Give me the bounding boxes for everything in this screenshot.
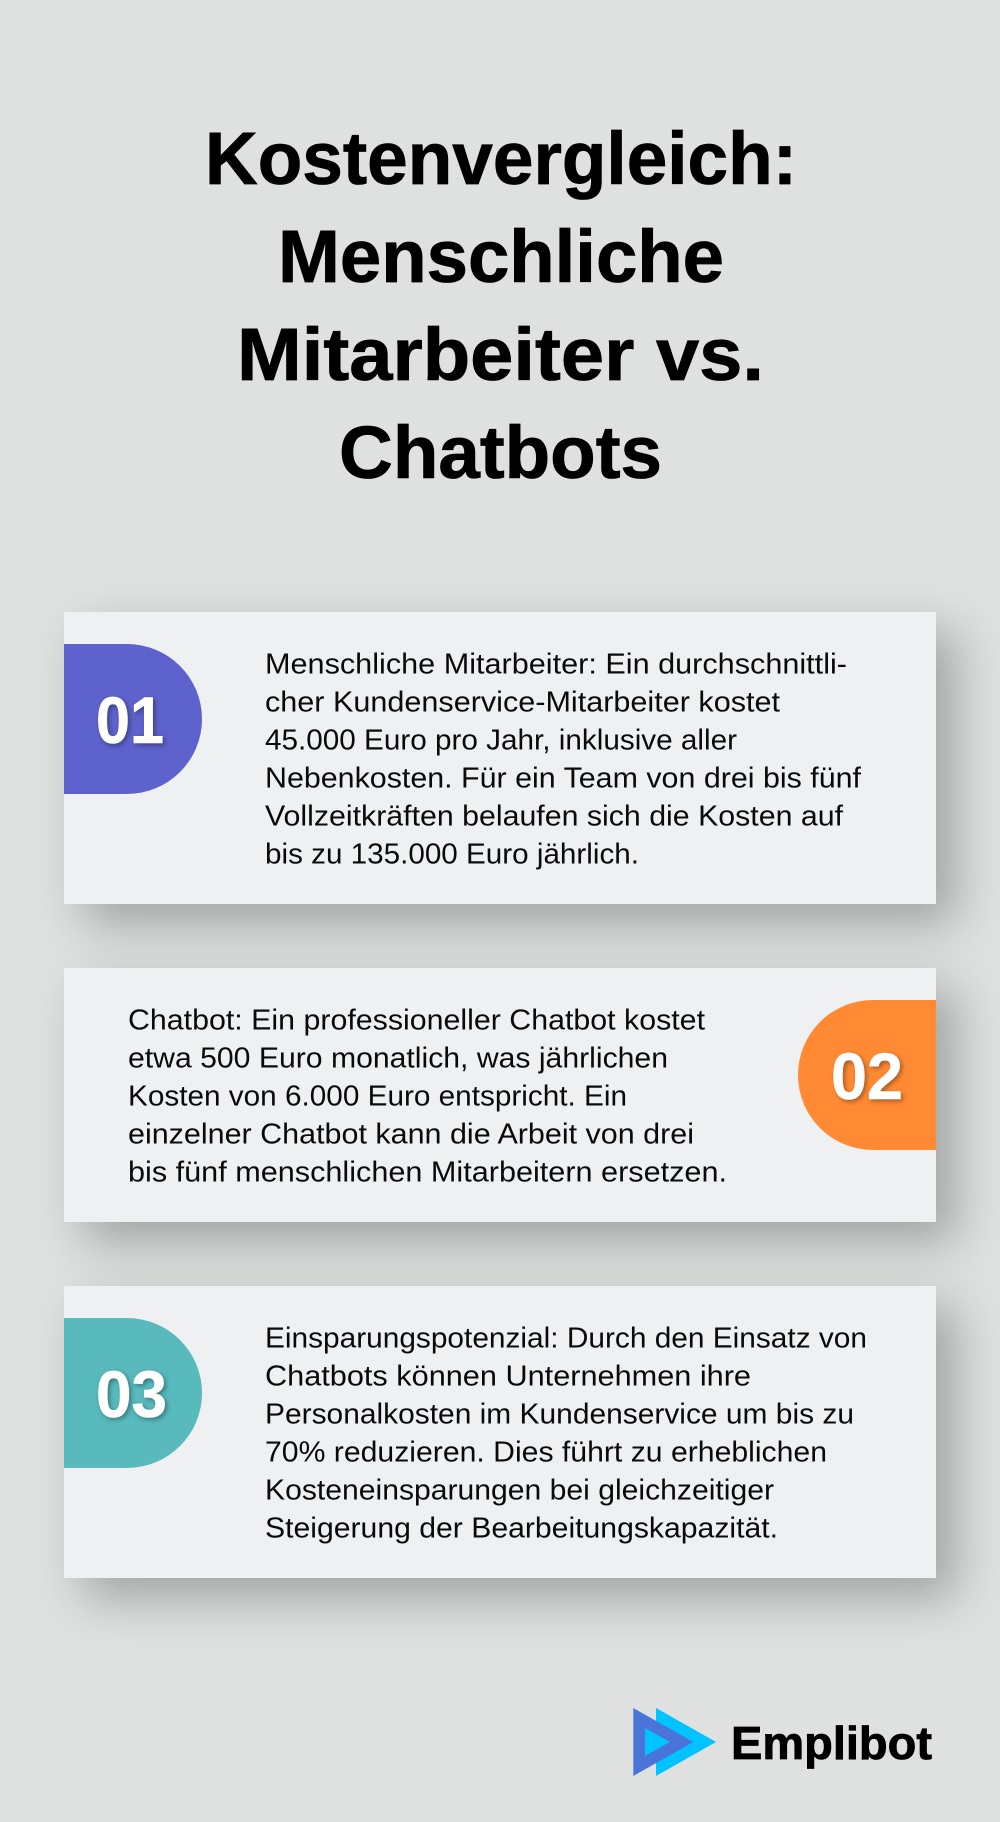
badge 01: 01 xyxy=(96,683,164,757)
title: Chatbots xyxy=(339,411,662,494)
title: Mitarbeiter vs. xyxy=(237,313,764,396)
text: chatbot costs: Kosten von 6.000 Euro entspricht. Ein xyxy=(128,1080,627,1112)
badge 03 xyxy=(64,1318,202,1468)
badge 02 xyxy=(798,1000,936,1150)
title: Menschliche xyxy=(278,215,724,298)
text: human employees costs: cher Kundenservice-Mitarbeiter kostet xyxy=(265,687,780,719)
text: savings potential: Kosteneinsparungen bei gleichzeitiger xyxy=(265,1474,774,1506)
text: human employees costs: 45.000 Euro pro Jahr, inklusive aller xyxy=(265,725,737,757)
panel: card 2 chatbot xyxy=(64,968,936,1222)
text: human employees costs: bis zu 135.000 Euro jährlich. xyxy=(265,839,639,871)
title: Kostenvergleich: xyxy=(205,117,797,200)
text: human employees costs xyxy=(265,649,862,871)
text: chatbot costs: einzelner Chatbot kann die Arbeit von drei xyxy=(128,1118,694,1150)
badge 01 xyxy=(64,644,202,794)
text: savings potential xyxy=(265,1322,867,1544)
text: human employees costs: Vollzeitkräften belaufen sich die Kosten auf xyxy=(265,801,844,833)
text: savings potential: 70% reduzieren. Dies führt zu erheblichen xyxy=(265,1436,827,1468)
icon: play triangles xyxy=(633,1708,716,1776)
text: savings potential: Chatbots können Unternehmen ihre xyxy=(265,1360,751,1392)
badge 03: 03 xyxy=(96,1357,167,1431)
text: savings potential: Personalkosten im Kundenservice um bis zu xyxy=(265,1398,854,1430)
text: human employees costs: Nebenkosten. Für ein Team von drei bis fünf xyxy=(265,763,862,795)
wordmark: Emplibot xyxy=(731,1717,932,1769)
logo: Emplibot xyxy=(633,1708,932,1776)
panel: card 1 human employees xyxy=(64,612,936,904)
text: chatbot costs: Chatbot: Ein professioneller Chatbot kostet xyxy=(128,1004,705,1036)
text: savings potential: Steigerung der Bearbeitungskapazität. xyxy=(265,1512,778,1544)
panel: card 3 savings xyxy=(64,1286,936,1578)
text: human employees costs: Menschliche Mitarbeiter: Ein durchschnittli- xyxy=(265,649,847,681)
text: chatbot costs xyxy=(128,1004,727,1188)
text: chatbot costs: etwa 500 Euro monatlich, was jährlichen xyxy=(128,1042,668,1074)
text: chatbot costs: bis fünf menschlichen Mitarbeitern ersetzen. xyxy=(128,1156,727,1188)
title xyxy=(205,117,797,494)
text: savings potential: Einsparungspotenzial: Durch den Einsatz von xyxy=(265,1322,867,1354)
badge 02: 02 xyxy=(831,1039,903,1113)
